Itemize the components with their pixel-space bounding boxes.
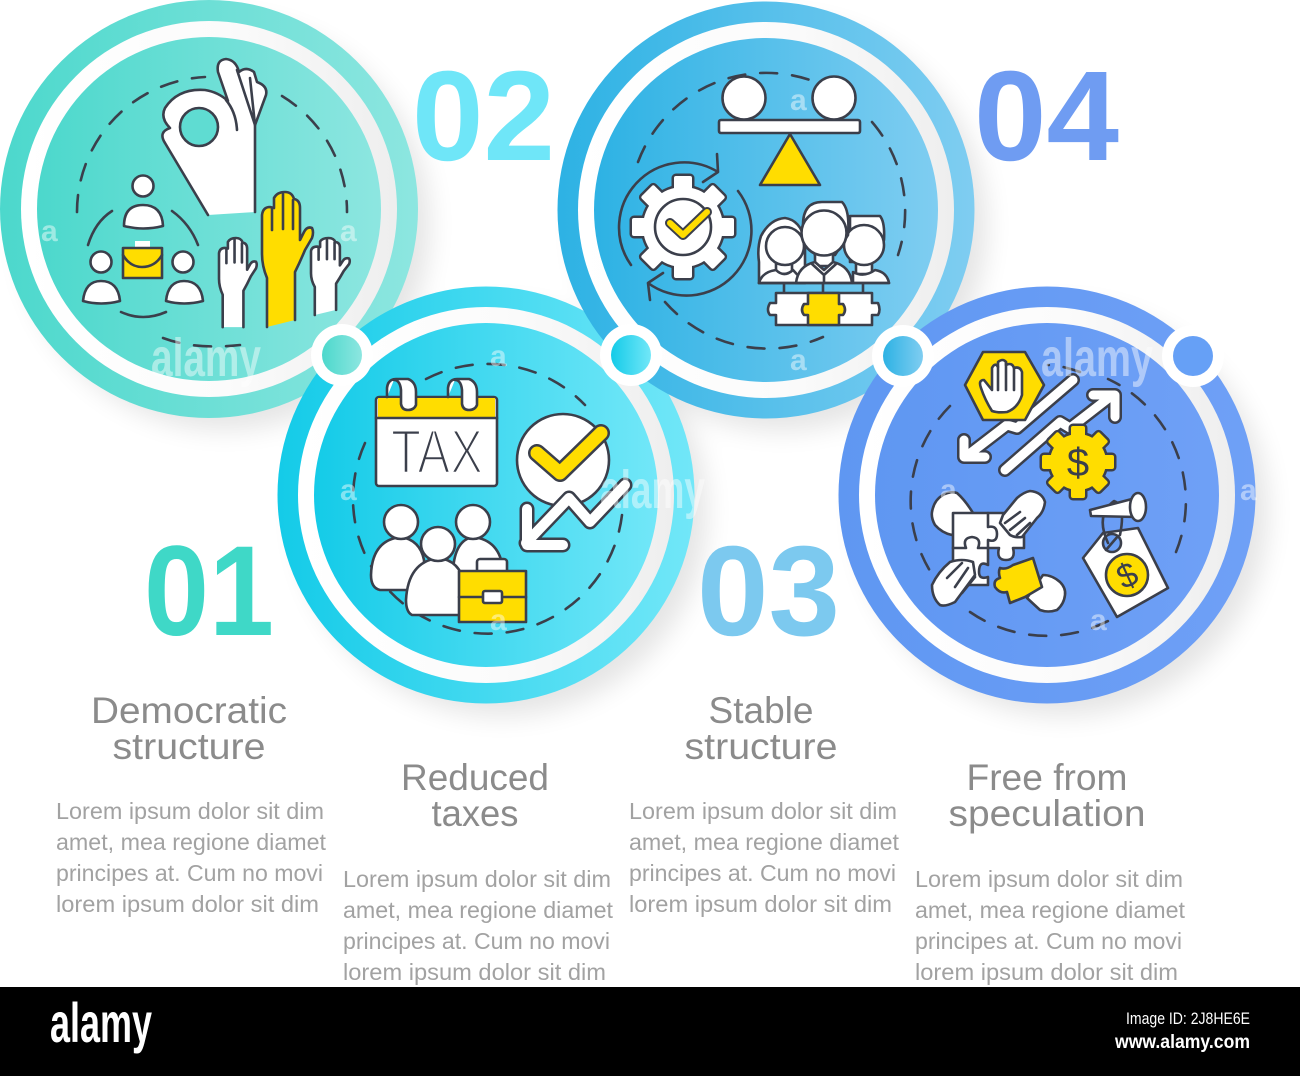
drop shadows	[20, 20, 1268, 716]
watermarks: a	[790, 344, 807, 377]
icon group: stable structure	[619, 73, 905, 349]
body text 3: principes at. Cum no movi	[629, 860, 896, 886]
body text 2: amet, mea regione diamet	[343, 897, 614, 923]
body text 4: amet, mea regione diamet	[915, 897, 1186, 923]
body text 2: lorem ipsum dolor sit dim	[343, 959, 606, 985]
body text 2: Lorem ipsum dolor sit dim	[343, 866, 611, 892]
inner disc: circle 4	[875, 323, 1219, 667]
icon: team and puzzle	[758, 202, 889, 325]
watermarks: a	[340, 474, 357, 507]
tag dollar sign: $	[1111, 555, 1144, 597]
heading: free from speculation: Free from	[966, 757, 1128, 798]
body text 1: lorem ipsum dolor sit dim	[56, 891, 319, 917]
gear dollar sign: $	[1067, 441, 1089, 485]
heading: reduced taxes	[401, 757, 549, 834]
icon: white raised hand left	[219, 238, 257, 327]
outer ring: circle 3	[558, 2, 974, 418]
white ring: circle 2	[298, 307, 674, 683]
white ring: circle 1	[21, 21, 397, 397]
number 04: 04	[974, 45, 1119, 188]
heading: free from speculation	[948, 757, 1146, 834]
connector dot 3	[872, 325, 934, 387]
body text 2: principes at. Cum no movi	[343, 928, 610, 954]
icon: people with briefcase	[371, 505, 526, 622]
icon: falling arrow	[526, 485, 625, 545]
heading: free from speculation: speculation	[948, 793, 1146, 834]
icon group: free from speculation	[911, 352, 1186, 636]
body text 4: Lorem ipsum dolor sit dim	[915, 866, 1183, 892]
icon: price tag	[1083, 493, 1168, 617]
icon: OK hand	[162, 59, 266, 215]
icon: stop sign hand	[965, 352, 1044, 420]
dashed orbit	[638, 73, 905, 349]
heading: stable structure: Stable	[708, 690, 814, 731]
icon: tax calendar	[376, 379, 497, 487]
watermarks: a	[490, 604, 507, 637]
watermarks	[41, 84, 1257, 637]
inner disc: circle 1	[37, 37, 381, 381]
body text 4: principes at. Cum no movi	[915, 928, 1182, 954]
inner disc: circle 3	[594, 38, 938, 382]
connector dot 2	[600, 324, 662, 386]
dashed orbit	[353, 364, 622, 634]
outer ring: circle 4	[838, 286, 1256, 704]
image id: Image ID: 2J8HE6E	[1126, 1009, 1250, 1028]
number 02: 02	[412, 45, 555, 188]
icon: team around briefcase	[83, 176, 203, 317]
heading: democratic structure	[91, 690, 287, 767]
body text 1: amet, mea regione diamet	[56, 829, 327, 855]
watermarks: a	[490, 340, 507, 373]
icon: hands and puzzle	[932, 491, 1065, 612]
body text 3	[629, 798, 900, 917]
white ring: circle 3	[578, 22, 954, 398]
dashed orbit	[911, 365, 1186, 636]
footer logo: alamy	[50, 991, 152, 1054]
icon: dollar gear	[1042, 426, 1114, 498]
watermarks: alamy	[1041, 328, 1153, 388]
icon: rising arrow	[1005, 395, 1115, 470]
watermarks: alamy	[151, 328, 261, 388]
heading: democratic structure: Democratic	[91, 690, 287, 731]
watermarks: a	[1240, 474, 1257, 507]
body text 1: principes at. Cum no movi	[56, 860, 323, 886]
watermarks: alamy	[600, 460, 705, 520]
icon: gear with cycle arrows	[619, 154, 751, 300]
icon: check badge	[517, 414, 609, 506]
outer ring: circle 1	[0, 0, 418, 418]
watermarks: a	[790, 84, 807, 117]
icon: yellow raised hand	[262, 192, 313, 327]
body text 1	[56, 798, 327, 917]
heading: democratic structure: structure	[112, 726, 266, 767]
icon: balance	[719, 76, 860, 185]
icon: falling arrow	[964, 380, 1073, 457]
heading: stable structure: structure	[684, 726, 838, 767]
icon group: democratic structure	[77, 59, 350, 346]
heading: reduced taxes: Reduced	[401, 757, 549, 798]
watermarks: a	[340, 215, 357, 248]
connector dot 4	[1162, 325, 1224, 387]
footer bar	[0, 987, 1300, 1076]
body text 2	[343, 866, 614, 985]
watermarks: a	[41, 215, 58, 248]
calendar label: TAX	[391, 418, 483, 487]
icon: white raised hand right	[311, 238, 350, 315]
body text 4	[915, 866, 1186, 985]
heading: stable structure	[684, 690, 838, 767]
icon group: reduced taxes	[353, 364, 625, 634]
footer url: www.alamy.com	[1114, 1032, 1250, 1053]
number 01: 01	[144, 520, 274, 663]
body text 4: lorem ipsum dolor sit dim	[915, 959, 1178, 985]
body text 3: Lorem ipsum dolor sit dim	[629, 798, 897, 824]
watermarks: a	[940, 474, 957, 507]
body text 3: amet, mea regione diamet	[629, 829, 900, 855]
white ring: circle 4	[859, 307, 1235, 683]
body text 3: lorem ipsum dolor sit dim	[629, 891, 892, 917]
connector dot 1	[311, 324, 373, 386]
body text 1: Lorem ipsum dolor sit dim	[56, 798, 324, 824]
inner disc: circle 2	[314, 323, 658, 667]
watermarks: a	[1090, 604, 1107, 637]
heading: reduced taxes: taxes	[432, 793, 518, 834]
number 03: 03	[697, 520, 840, 663]
outer ring: circle 2	[278, 286, 694, 704]
dashed orbit	[77, 77, 347, 346]
